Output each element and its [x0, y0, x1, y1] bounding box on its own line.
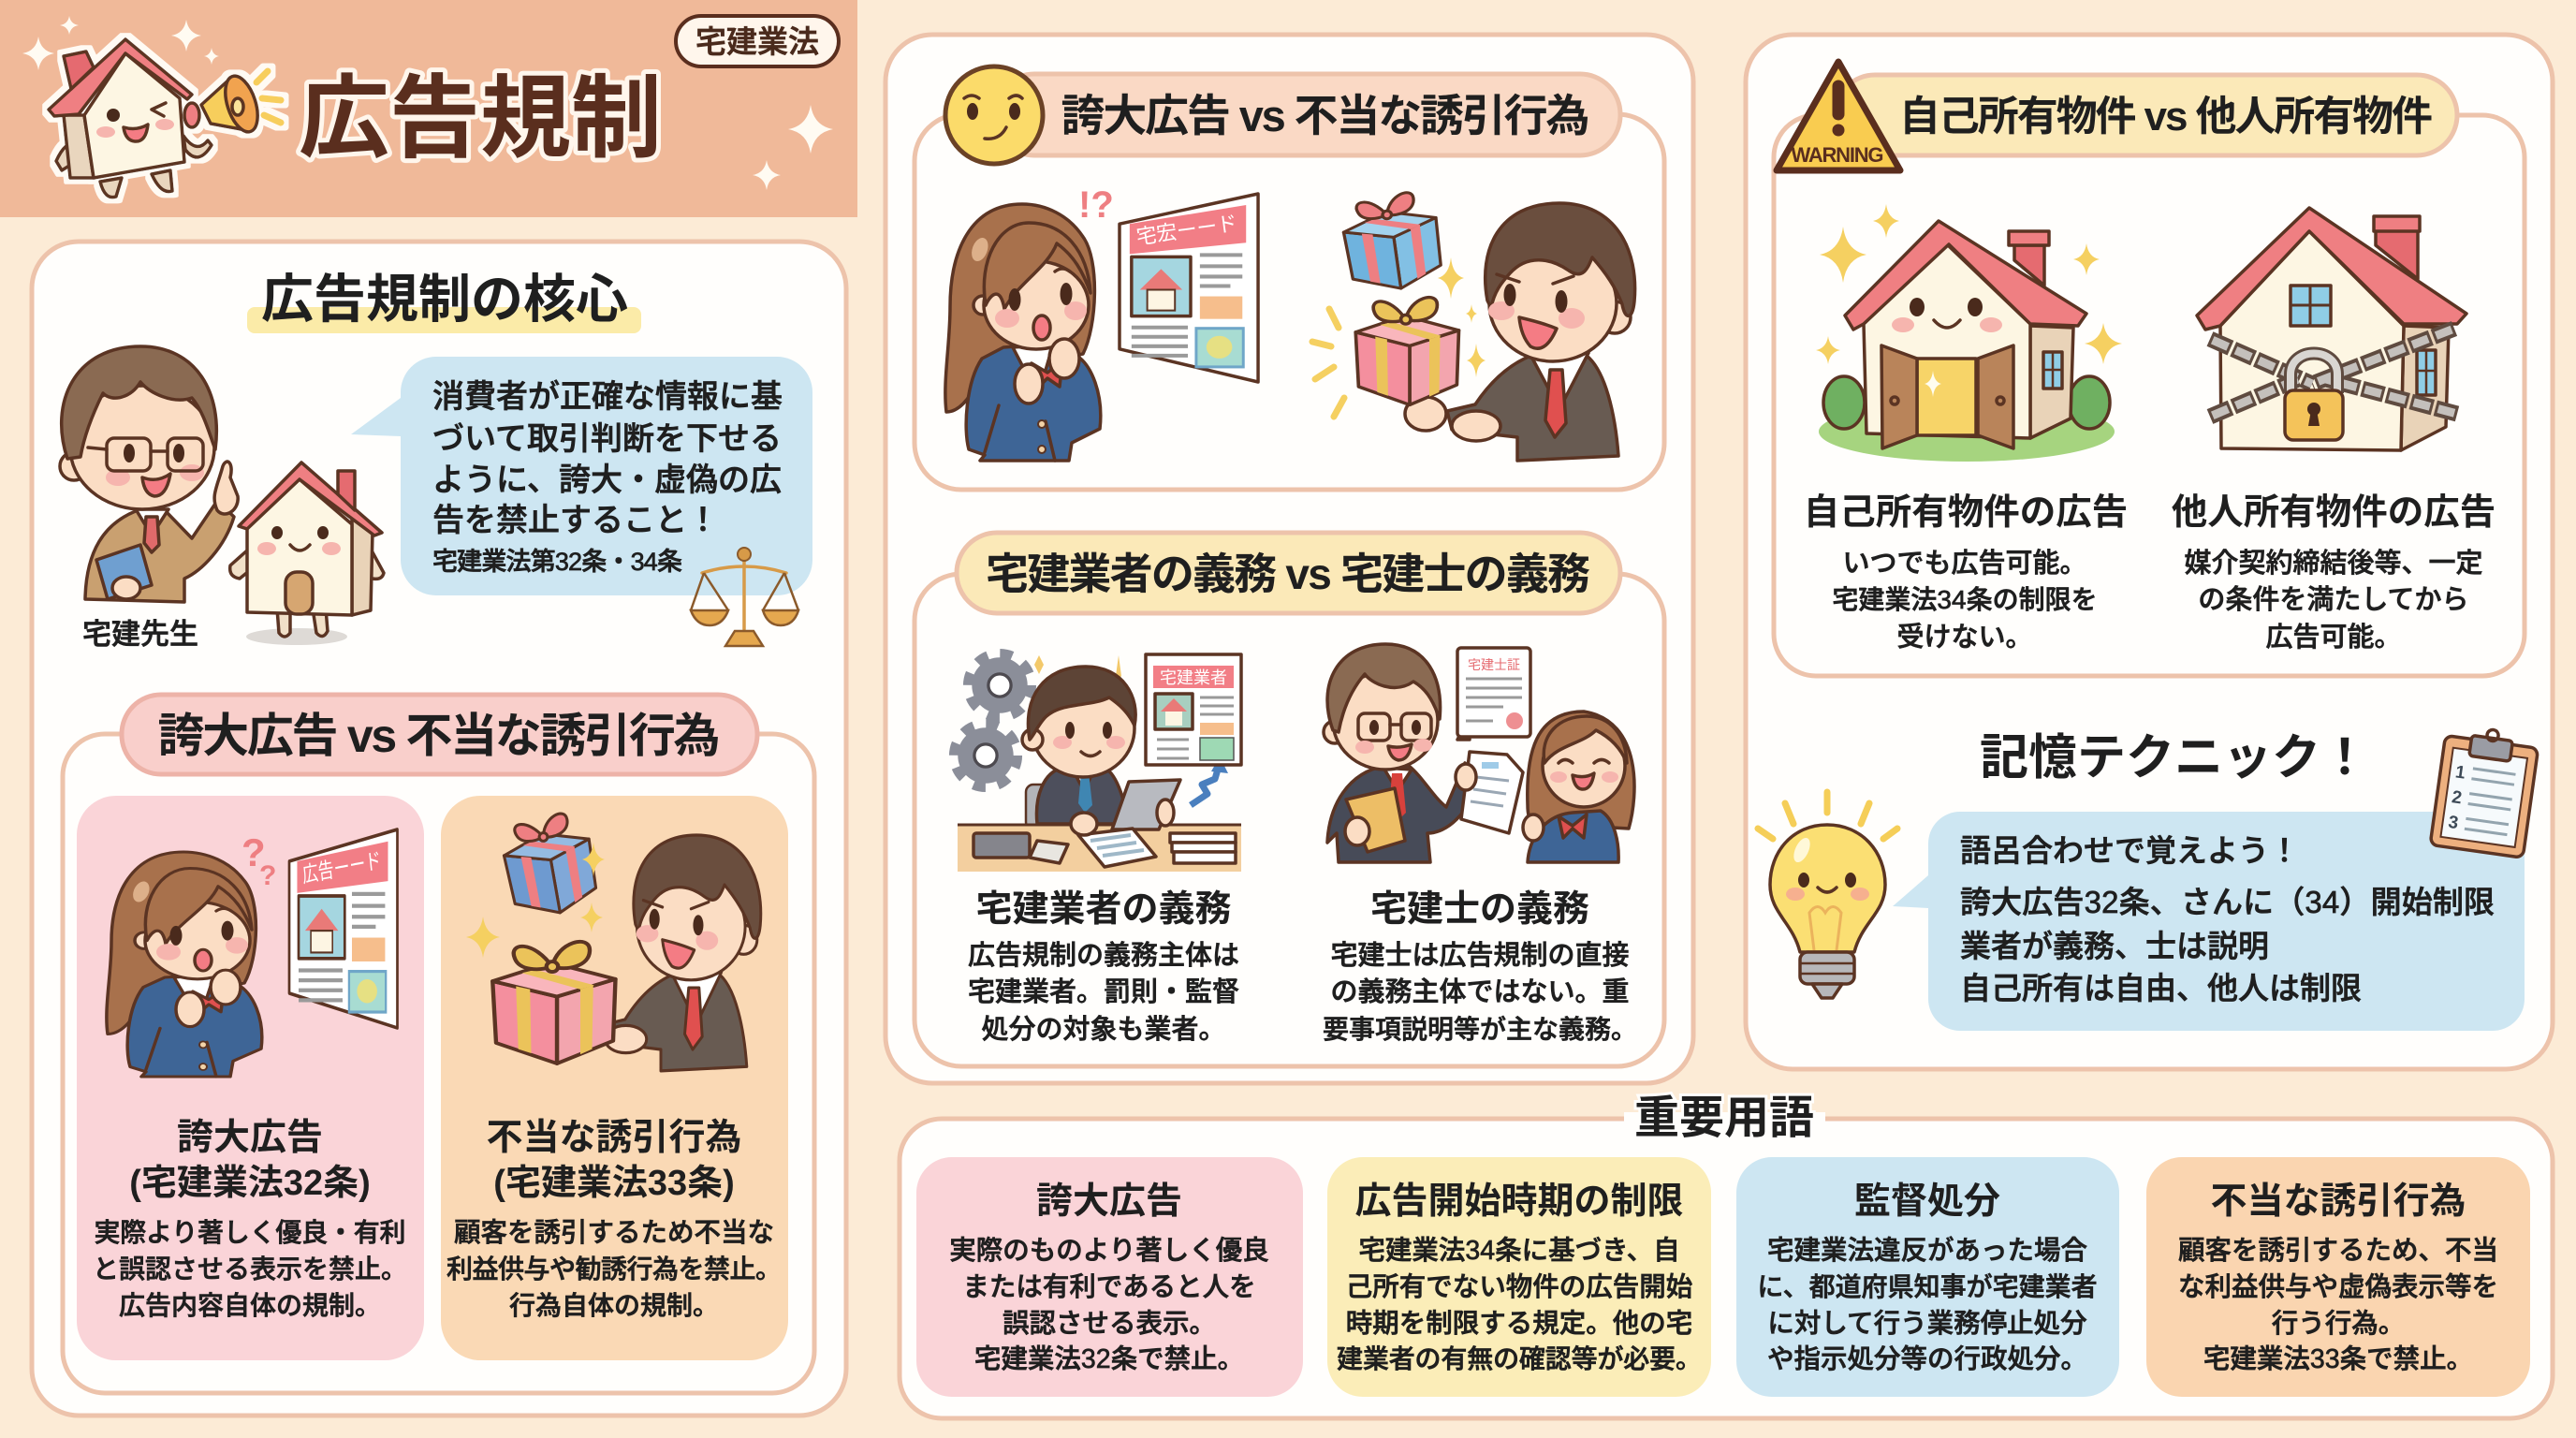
text: 宅建業者の義務: 宅建業者の義務	[975, 889, 1232, 930]
card: 不当な誘引行為	[2146, 1157, 2530, 1397]
text: 自己所有物件の広告: いつでも広告可能。	[1842, 548, 2087, 579]
illustration: surprised girl	[945, 204, 1101, 461]
illustration: agent at desk	[957, 655, 1241, 872]
text: 自己所有物件の広告: 受けない。	[1896, 622, 2033, 653]
icon: question marks	[242, 830, 276, 891]
icon: exclamation and question: !?	[1078, 184, 1114, 226]
card: 不当な誘引行為: 不当な誘引行為	[2210, 1181, 2466, 1222]
icon: clipboard list: 1	[2454, 762, 2467, 784]
badge: 宅建業法	[676, 16, 839, 66]
text: 自己所有物件の広告: 自己所有物件の広告	[1804, 492, 2128, 533]
callout: core message bubble: 宅建業法第32条・34条	[432, 548, 682, 576]
text: 他人所有物件の広告: 他人所有物件の広告	[2172, 492, 2496, 533]
illustration: surprised girl	[107, 852, 262, 1077]
text: 誇大広告: と誤認させる表示を禁止。	[93, 1255, 407, 1284]
card: 広告開始時期の制限: 広告開始時期の制限	[1354, 1181, 1684, 1222]
heading: 記憶テクニック: 記憶テクニック！	[1980, 731, 2369, 785]
text: 宅建士の義務: 要事項説明等が主な義務。	[1323, 1015, 1637, 1044]
card: 誇大広告: 誤認させる表示。	[1003, 1309, 1216, 1339]
text: 不当な誘引行為: 不当な誘引行為	[486, 1118, 742, 1158]
text: 宅建業者の義務: 処分の対象も業者。	[981, 1014, 1226, 1045]
text: 自己所有物件の広告	[1804, 492, 2128, 653]
icon: light bulb	[1758, 792, 1897, 998]
illustration: advertisement poster	[289, 829, 397, 1028]
text: 誇大広告: (宅建業法32条)	[129, 1164, 371, 1203]
card: 不当な誘引行為: 行う行為。	[2272, 1309, 2405, 1339]
callout: mnemonic bubble: 語呂合わせで覚えよう！	[1960, 833, 2300, 868]
illustration: man with gift	[1405, 203, 1635, 461]
icon: warning triangle: WARNING	[1792, 143, 1883, 167]
heading pill	[957, 533, 1620, 613]
panel: 広告規制の核心 and comparison	[32, 242, 846, 1416]
card: 誇大広告: または有利であると人を	[962, 1272, 1256, 1302]
illustration: open house	[1816, 204, 2122, 462]
text: 他人所有物件の広告: 媒介契約締結後等、一定	[2184, 548, 2483, 579]
callout: mnemonic bubble	[1893, 812, 2525, 1031]
icon: clipboard list	[2430, 724, 2539, 858]
text: 誇大広告: 広告内容自体の規制。	[119, 1291, 381, 1320]
heading: 重要用語: 重要用語	[1634, 1093, 1814, 1143]
illustration: chained house	[2197, 208, 2466, 450]
heading pill	[122, 695, 757, 774]
header band	[0, 0, 857, 217]
card: 誇大広告: 実際のものより著しく優良	[949, 1236, 1269, 1266]
icon: pink gift	[492, 942, 616, 1064]
text: 他人所有物件の広告	[2172, 492, 2496, 653]
panel: 重要用語	[900, 1093, 2553, 1418]
illustration: teacher	[60, 346, 238, 602]
callout: core message bubble: づいて取引判断を下せる	[432, 421, 782, 457]
icon: question marks: ?	[259, 860, 276, 891]
text: 誇大広告	[93, 1118, 407, 1320]
heading pill	[994, 74, 1620, 155]
icon: blue gift	[499, 810, 601, 920]
text: 不当な誘引行為: 顧客を誘引するため不当な	[454, 1218, 774, 1248]
card: 広告開始時期の制限: 己所有でない物件の広告開始	[1346, 1272, 1692, 1302]
text: 宅建業者の義務: 広告規制の義務主体は	[968, 940, 1239, 971]
title: 広告規制	[299, 67, 662, 169]
illustration: licence document: 宅建士証	[1468, 657, 1520, 672]
card: 広告開始時期の制限	[1327, 1157, 1711, 1397]
text: 宅建業者の義務: 宅建業者。罰則・監督	[968, 976, 1239, 1007]
icon: clipboard list: 3	[2447, 813, 2460, 833]
illustration: wall notice	[1146, 654, 1241, 765]
icon: sparkle rays	[1312, 257, 1486, 417]
callout: core message bubble: 告を禁止すること！	[432, 503, 719, 538]
icon: house mascot with megaphone	[49, 39, 281, 198]
text: 誇大広告: 誇大広告	[177, 1118, 323, 1158]
card: 誇大広告: 宅建業法32条で禁止。	[974, 1344, 1244, 1374]
heading pill	[1835, 75, 2457, 155]
callout: core message bubble	[351, 357, 812, 595]
card: 監督処分: に対して行う業務停止処分	[1767, 1309, 2087, 1339]
card: 監督処分: 監督処分	[1854, 1181, 2000, 1222]
text: 不当な誘引行為: 利益供与や勧誘行為を禁止。	[446, 1255, 782, 1284]
panel: 誇大広告 vs 不当な誘引行為 (scene)	[915, 66, 1664, 490]
illustration: smiling house	[230, 462, 384, 645]
icon: smiley	[945, 66, 1043, 164]
text: 他人所有物件の広告: 広告可能。	[2265, 622, 2402, 653]
icon: gold sparkles	[466, 843, 605, 958]
text: 他人所有物件の広告: の条件を満たしてから	[2198, 584, 2469, 615]
badge: 宅建業法: 宅建業法	[695, 24, 819, 59]
text: 誇大広告: 実際より著しく優良・有利	[94, 1218, 406, 1247]
heading pill: 誇大広告 vs 不当な誘引行為	[157, 710, 721, 762]
card: 不当な誘引行為: 顧客を誘引するため、不当	[2178, 1236, 2498, 1266]
icon: white sparkles	[22, 16, 833, 190]
heading: 広告規制の核心: 広告規制の核心	[261, 270, 628, 329]
text: 宅建士の義務	[1323, 889, 1637, 1044]
card: 誇大広告	[77, 796, 424, 1360]
panel: 自己所有物件 vs 他人所有物件	[1774, 62, 2525, 676]
callout: core message bubble: 消費者が正確な情報に基	[432, 379, 783, 415]
illustration: advertisement poster: 宅宏ーード	[1134, 211, 1238, 249]
icon: warning triangle	[1777, 62, 1900, 170]
callout: mnemonic bubble: 誇大広告32条、さんに（34）開始制限	[1960, 885, 2495, 919]
card: 誇大広告	[916, 1157, 1303, 1397]
text: 不当な誘引行為	[446, 1118, 782, 1320]
card: 広告開始時期の制限: 時期を制限する規定。他の宅	[1346, 1309, 1692, 1339]
heading pill: 誇大広告 vs 不当な誘引行為	[1061, 91, 1589, 140]
card: 監督処分: や指示処分等の行政処分。	[1767, 1344, 2087, 1374]
card: 広告開始時期の制限: 建業者の有無の確認等が必要。	[1337, 1344, 1702, 1373]
text: 不当な誘引行為: (宅建業法33条)	[493, 1164, 735, 1203]
text: 不当な誘引行為: 行為自体の規制。	[509, 1291, 719, 1320]
panel: right column	[1746, 35, 2553, 1069]
heading pill: 宅建業者の義務 vs 宅建士の義務	[986, 550, 1590, 598]
text: 宅建業者の義務	[968, 889, 1239, 1045]
callout: core message bubble: ように、誇大・虚偽の広	[432, 462, 782, 498]
text: 宅建士の義務: 宅建士は広告規制の直接	[1330, 940, 1630, 971]
card: 監督処分: に、都道府県知事が宅建業者	[1757, 1272, 2098, 1301]
label: 宅建先生: 宅建先生	[82, 618, 198, 651]
icon: pink gift	[1355, 298, 1458, 404]
panel: 誇大広告 vs 不当な誘引行為	[63, 695, 814, 1393]
card: 不当な誘引行為	[441, 796, 788, 1360]
icon: question marks: ?	[242, 830, 266, 874]
illustration: advertisement poster: 広告ーード	[301, 848, 382, 888]
card: 監督処分	[1736, 1157, 2119, 1397]
icon: scales	[691, 548, 798, 646]
callout: mnemonic bubble: 自己所有は自由、他人は制限	[1960, 971, 2362, 1005]
card: 誇大広告: 誇大広告	[1036, 1181, 1182, 1222]
illustration: licence document	[1457, 648, 1530, 737]
card: 監督処分: 宅建業法違反があった場合	[1767, 1236, 2087, 1266]
card: 広告開始時期の制限: 宅建業法34条に基づき、自	[1358, 1236, 1680, 1266]
panel: 宅建業者の義務 vs 宅建士の義務	[915, 533, 1664, 1066]
heading pill: 自己所有物件 vs 他人所有物件	[1899, 94, 2433, 139]
icon: clipboard list: 2	[2451, 787, 2463, 808]
text: 宅建士の義務: の義務主体ではない。重	[1330, 976, 1630, 1007]
card: 不当な誘引行為: 宅建業法33条で禁止。	[2203, 1344, 2473, 1374]
text: 自己所有物件の広告: 宅建業法34条の制限を	[1832, 585, 2098, 614]
icon: blue gift	[1339, 189, 1445, 295]
text: 宅建士の義務: 宅建士の義務	[1370, 889, 1589, 930]
illustration: man offering gift	[565, 835, 761, 1071]
illustration: advertisement poster	[1120, 194, 1258, 382]
illustration: wall notice: 宅建業者	[1160, 668, 1227, 687]
card: 不当な誘引行為: な利益供与や虚偽表示等を	[2178, 1272, 2498, 1302]
illustration: licensed agent and student	[1324, 644, 1634, 862]
callout: mnemonic bubble: 業者が義務、士は説明	[1960, 929, 2269, 963]
panel: middle column	[886, 35, 1693, 1083]
